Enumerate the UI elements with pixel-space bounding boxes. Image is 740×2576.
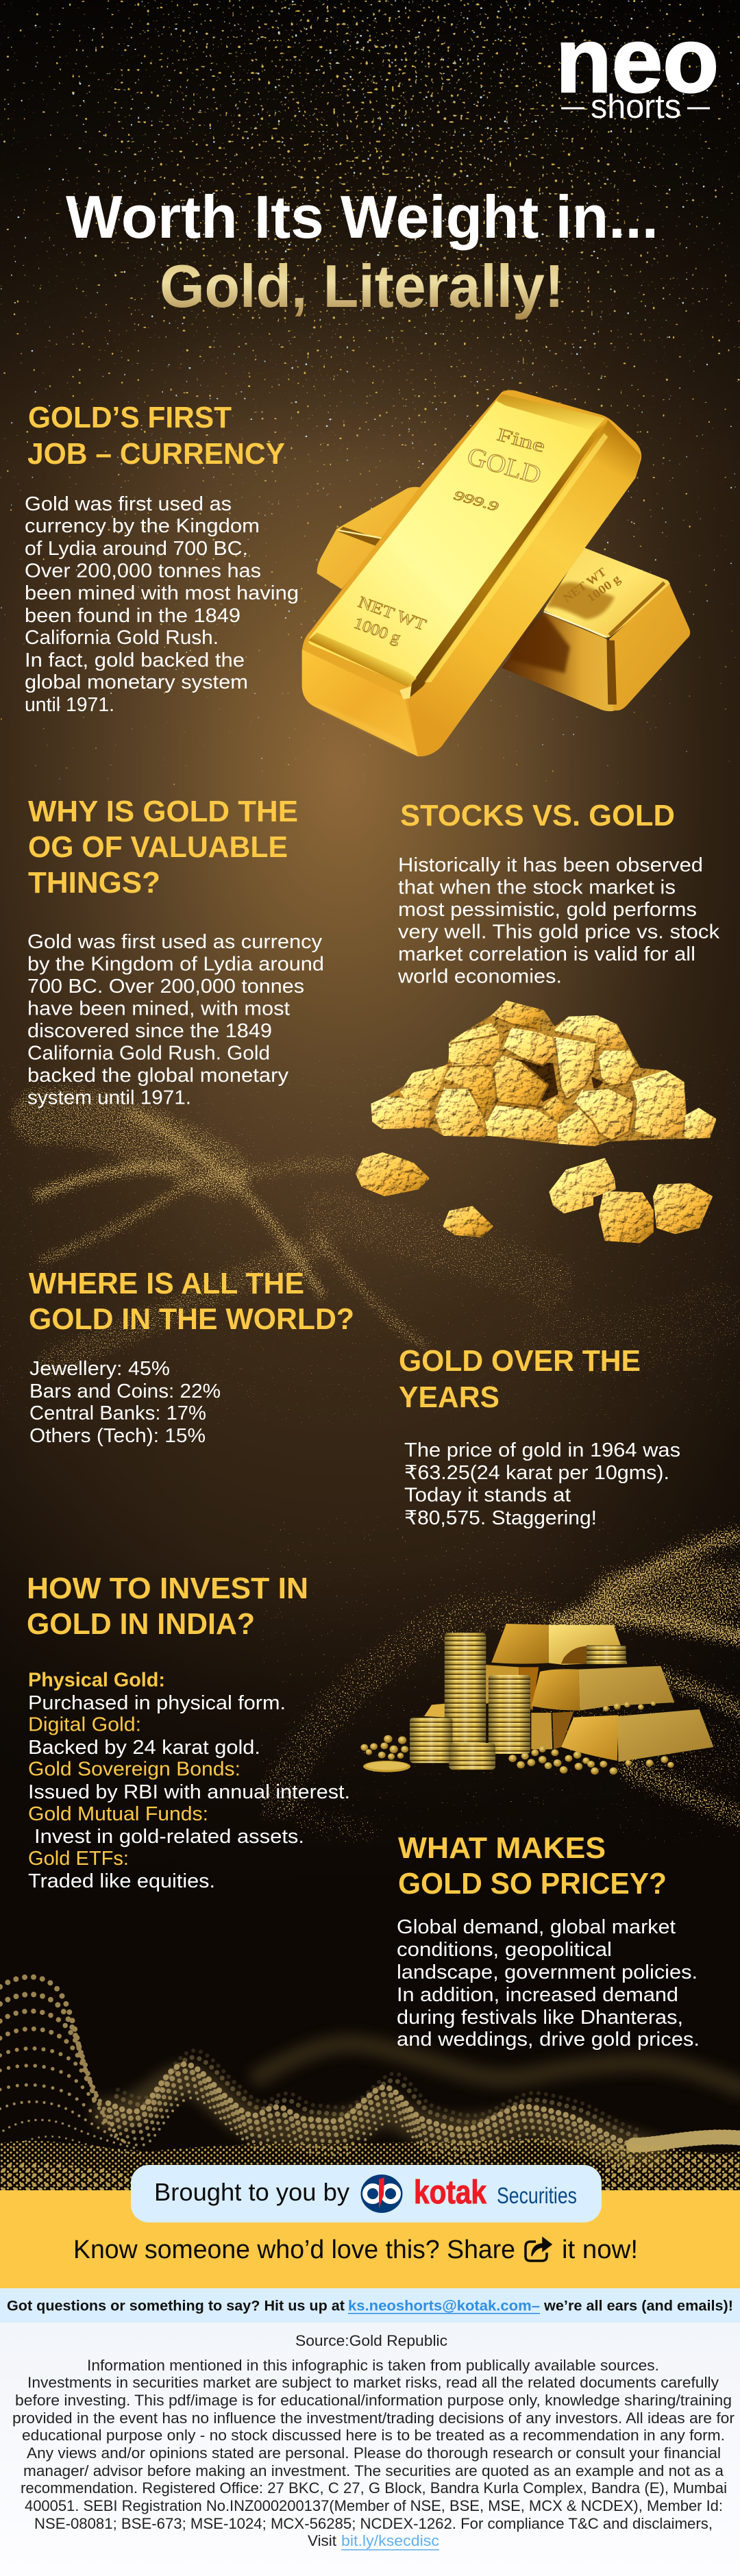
list of options: Physical Gold: bbox=[28, 1669, 165, 1691]
contact strip bbox=[0, 2288, 740, 2323]
source line: Source:Gold Republic bbox=[295, 2332, 447, 2349]
disclaimer panel bbox=[0, 2323, 740, 2576]
main bar: 1000 g bbox=[352, 615, 403, 647]
heading bbox=[29, 1267, 354, 1336]
list of options bbox=[28, 1669, 350, 1892]
title: Worth Its Weight in... bbox=[66, 183, 658, 251]
main bar bbox=[302, 390, 641, 756]
body text: conditions, geopolitical bbox=[397, 1939, 612, 1961]
body text: In addition, increased demand bbox=[397, 1984, 678, 2006]
title: Gold, Literally! bbox=[160, 252, 564, 320]
back bar bbox=[317, 487, 690, 711]
body text: during festivals like Dhanteras, bbox=[397, 2007, 683, 2029]
body text: of Lydia around 700 BC. bbox=[25, 538, 248, 560]
starfield bbox=[0, 0, 740, 788]
heading: YEARS bbox=[399, 1380, 500, 1414]
body text: world economies. bbox=[397, 966, 562, 988]
body text: most pessimistic, gold performs bbox=[398, 899, 697, 921]
body text: discovered since the 1849 bbox=[27, 1020, 272, 1042]
body text: have been mined, with most bbox=[27, 998, 290, 1019]
body text: Others (Tech): 15% bbox=[29, 1425, 206, 1447]
heading: GOLD IN THE WORLD? bbox=[29, 1302, 354, 1336]
body text: Over 200,000 tonnes has bbox=[25, 560, 261, 582]
disclaimer text: bit.ly/ksecdisc bbox=[341, 2532, 439, 2549]
heading: WHERE IS ALL THE bbox=[29, 1267, 304, 1300]
body text: ₹63.25(24 karat per 10gms). bbox=[404, 1462, 669, 1484]
back bar: 1000 g bbox=[584, 571, 623, 605]
body text: currency by the Kingdom bbox=[25, 515, 260, 537]
heading: OG OF VALUABLE bbox=[28, 830, 288, 864]
disclaimer text: provided in the event has no influence the investment/trading decisions of any investors. All ideas are for bbox=[12, 2410, 735, 2427]
body text: landscape, government policies. bbox=[397, 1961, 698, 1983]
main bar: GOLD bbox=[464, 443, 544, 490]
heading: GOLD’S FIRST bbox=[28, 401, 232, 434]
logo: neo shorts: shorts bbox=[591, 88, 681, 125]
gold dust stream: middle bbox=[38, 1113, 713, 1363]
body text bbox=[27, 931, 324, 1109]
body text: very well. This gold price vs. stock bbox=[398, 921, 720, 943]
decorative dotted gold wave bbox=[0, 1977, 740, 2190]
panel: what makes gold so pricey bbox=[397, 1831, 700, 2051]
main bar: NET WT bbox=[356, 593, 429, 634]
back bar: NET WT bbox=[560, 565, 609, 605]
body text: The price of gold in 1964 was bbox=[404, 1439, 680, 1461]
gold dust stream: right bbox=[274, 1535, 740, 1829]
body text: system until 1971. bbox=[27, 1087, 191, 1109]
heading: HOW TO INVEST IN bbox=[27, 1572, 308, 1605]
body text: global monetary system bbox=[25, 671, 248, 693]
heading bbox=[27, 1572, 308, 1641]
sponsor pill: Brought to you by bbox=[154, 2178, 349, 2206]
heading bbox=[28, 795, 298, 900]
disclaimer text: before investing. This pdf/image is for educational/information purpose only, knowledge sharing/training bbox=[15, 2392, 732, 2409]
illustration: gold nuggets bbox=[356, 1002, 715, 1242]
body text: Historically it has been observed bbox=[398, 854, 703, 876]
body text bbox=[25, 493, 299, 716]
heading: JOB – CURRENCY bbox=[27, 437, 285, 471]
disclaimer text bbox=[12, 2357, 735, 2550]
body text: Gold was first used as bbox=[25, 493, 232, 515]
panel: gold's first job bbox=[25, 401, 299, 716]
heading: GOLD OVER THE bbox=[399, 1344, 641, 1378]
title bbox=[66, 183, 658, 320]
gold granules bbox=[360, 1701, 674, 1774]
list of options: Issued by RBI with annual interest. bbox=[28, 1781, 350, 1803]
logo: neo shorts: neo bbox=[556, 10, 719, 112]
icon: kotak logo bbox=[360, 2175, 403, 2213]
body text: In fact, gold backed the bbox=[25, 649, 245, 671]
top bar bbox=[491, 1624, 627, 1665]
illustration: gold bars bbox=[302, 390, 690, 756]
back bars bbox=[424, 1665, 574, 1749]
body text: Jewellery: 45% bbox=[29, 1358, 170, 1380]
coin stacks bbox=[363, 1633, 626, 1772]
body text: Today it stands at bbox=[404, 1484, 571, 1506]
panel: how to invest in gold in India bbox=[27, 1572, 350, 1892]
heading bbox=[398, 1831, 667, 1900]
disclaimer text: Visit bbox=[308, 2532, 336, 2549]
list of options: Gold Mutual Funds: bbox=[28, 1803, 208, 1825]
sponsor pill: Securities bbox=[497, 2183, 577, 2208]
body text: until 1971. bbox=[25, 694, 114, 716]
list of options: Invest in gold-related assets. bbox=[34, 1826, 304, 1848]
body text: been found in the 1849 bbox=[25, 605, 241, 627]
middle bar bbox=[531, 1666, 674, 1711]
heading: THINGS? bbox=[28, 866, 160, 900]
body text: market correlation is valid for all bbox=[398, 943, 695, 965]
body text: Gold was first used as currency bbox=[27, 931, 323, 953]
heading: STOCKS VS. GOLD bbox=[400, 799, 675, 832]
body text: backed the global monetary bbox=[27, 1065, 289, 1087]
share call to action: Know someone who’d love this? Share bbox=[73, 2236, 515, 2264]
heading bbox=[27, 401, 285, 471]
disclaimer text: 400051. SEBI Registration No.INZ000200137(Member of NSE, BSE, MSE, MCX & NCDEX), Member Id: bbox=[25, 2497, 723, 2514]
body text: by the Kingdom of Lydia around bbox=[27, 954, 324, 976]
share call to action: it now! bbox=[562, 2236, 638, 2264]
disclaimer text: Investments in securities market are subject to market risks, read all the related documents carefully bbox=[27, 2374, 719, 2391]
body text: California Gold Rush. Gold bbox=[27, 1043, 270, 1065]
body text bbox=[404, 1439, 680, 1529]
body text: 700 BC. Over 200,000 tonnes bbox=[27, 976, 304, 998]
sponsor pill: kotak bbox=[414, 2175, 486, 2211]
list of options: Digital Gold: bbox=[28, 1714, 141, 1736]
panel: gold over the years bbox=[399, 1344, 680, 1529]
contact strip: we’re all ears (and emails)! bbox=[543, 2298, 733, 2314]
heading: WHAT MAKES bbox=[398, 1831, 606, 1865]
disclaimer text: Any views and/or opinions stated are personal. Please do thorough research or consult your financial bbox=[27, 2444, 721, 2462]
panel: where is all the gold bbox=[29, 1267, 354, 1447]
heading: GOLD SO PRICEY? bbox=[398, 1867, 667, 1900]
body text: and weddings, drive gold prices. bbox=[397, 2029, 700, 2051]
body text bbox=[29, 1358, 221, 1447]
nugget pile bbox=[372, 1002, 715, 1145]
list of options: Gold ETFs: bbox=[28, 1848, 129, 1870]
main bar: 999.9 bbox=[452, 488, 500, 515]
heading: WHY IS GOLD THE bbox=[28, 795, 298, 828]
body text: been mined with most having bbox=[25, 582, 299, 604]
contact strip: ks.neoshorts@kotak.com– bbox=[348, 2298, 540, 2314]
list of options: Traded like equities. bbox=[28, 1870, 215, 1892]
body text: Global demand, global market bbox=[397, 1916, 676, 1938]
panel: why is gold the OG bbox=[27, 795, 324, 1109]
panel: stocks vs gold bbox=[397, 799, 720, 988]
loose nuggets bbox=[356, 1153, 712, 1242]
body text bbox=[397, 1916, 700, 2051]
body text: ₹80,575. Staggering! bbox=[404, 1507, 597, 1529]
disclaimer text: Information mentioned in this infographic is taken from publically available sources. bbox=[87, 2357, 659, 2374]
heading: GOLD IN INDIA? bbox=[27, 1607, 255, 1641]
icon: share arrow bbox=[526, 2238, 552, 2261]
contact strip: Got questions or something to say? Hit us up at bbox=[7, 2298, 345, 2314]
yellow share band bbox=[0, 2190, 740, 2288]
body text: Bars and Coins: 22% bbox=[29, 1380, 221, 1402]
illustration: gold bars and coins bbox=[360, 1624, 713, 1774]
list of options: Gold Sovereign Bonds: bbox=[28, 1759, 241, 1781]
disclaimer text: recommendation. Registered Office: 27 BKC, C 27, G Block, Bandra Kurla Complex, Bandra (E), Mumbai bbox=[21, 2479, 727, 2497]
sponsor pill bbox=[131, 2165, 602, 2222]
front bar bbox=[561, 1709, 713, 1762]
body text: Central Banks: 17% bbox=[29, 1402, 206, 1424]
disclaimer text: educational purpose only - no stock discussed here is to be treated as a recommendation in any form. bbox=[22, 2427, 725, 2444]
body text: California Gold Rush. bbox=[25, 627, 219, 649]
heading bbox=[399, 1344, 641, 1414]
main bar: Fine bbox=[495, 424, 547, 456]
list of options: Purchased in physical form. bbox=[28, 1692, 286, 1714]
body text: that when the stock market is bbox=[398, 877, 676, 899]
list of options: Backed by 24 karat gold. bbox=[28, 1737, 260, 1759]
body text bbox=[397, 854, 720, 988]
disclaimer text: manager/ advisor before making an investment. The securities are quoted as an example and not as a bbox=[23, 2462, 724, 2479]
disclaimer text: NSE-08081; BSE-673; MSE-1024; MCX-56285; NCDEX-1262. For compliance T&C and disclaimers, bbox=[34, 2515, 713, 2532]
